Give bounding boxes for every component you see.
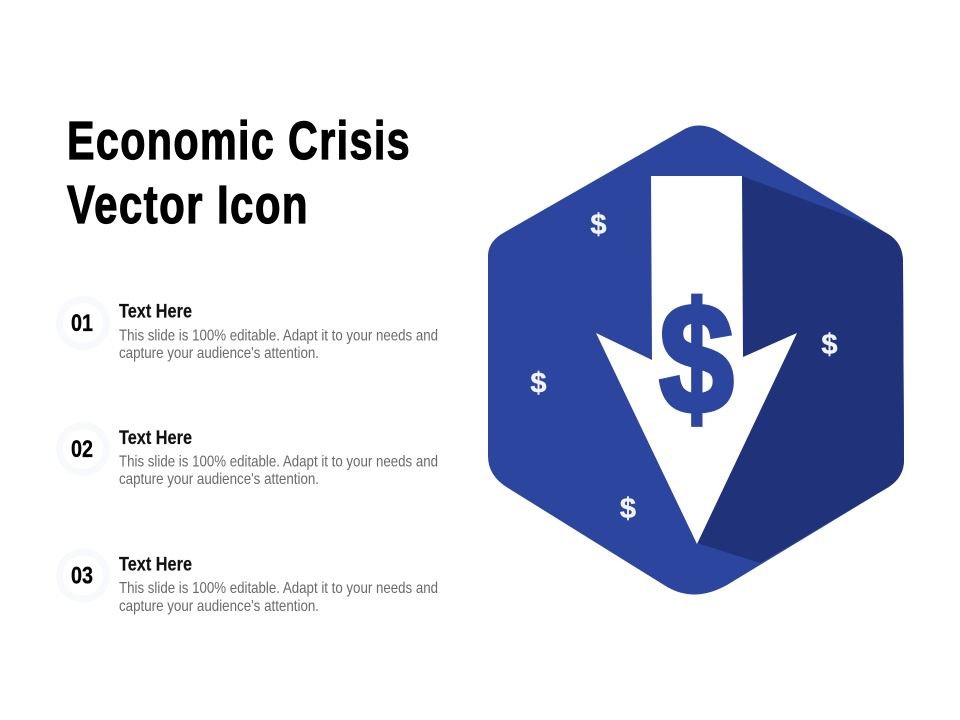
small dollar signs: $ bbox=[530, 368, 547, 400]
list item 02 bbox=[60, 426, 438, 488]
list item 03 bbox=[60, 552, 438, 615]
item heading 03: Text Here bbox=[119, 554, 192, 576]
large dollar sign: $ bbox=[659, 270, 734, 446]
item heading 01: Text Here bbox=[119, 302, 192, 322]
title bbox=[67, 111, 411, 235]
title: Vector Icon bbox=[67, 175, 309, 235]
small dollar signs: $ bbox=[590, 209, 607, 241]
item body 02: capture your audience's attention. bbox=[119, 471, 319, 488]
title: Economic Crisis bbox=[67, 111, 411, 171]
small dollar signs bbox=[530, 209, 838, 525]
item body 03: capture your audience's attention. bbox=[119, 598, 319, 615]
item body 01 bbox=[119, 328, 438, 362]
folded shadow bbox=[697, 176, 904, 563]
number badge 03 bbox=[60, 552, 106, 599]
hexagon icon bbox=[488, 126, 904, 594]
item body 01: capture your audience's attention. bbox=[119, 345, 319, 362]
item body 03 bbox=[119, 580, 438, 615]
number badge 02 bbox=[60, 426, 106, 472]
item body 02: This slide is 100% editable. Adapt it to your needs and bbox=[119, 454, 438, 470]
item heading 02: Text Here bbox=[119, 428, 192, 449]
number badge 01 bbox=[60, 300, 106, 346]
item body 02 bbox=[119, 454, 438, 488]
item body 03: This slide is 100% editable. Adapt it to your needs and bbox=[119, 580, 438, 597]
small dollar signs: $ bbox=[620, 493, 636, 525]
down arrow bbox=[596, 176, 797, 544]
number badge 03: 03 bbox=[71, 562, 93, 590]
item body 01: This slide is 100% editable. Adapt it to your needs and bbox=[119, 328, 438, 344]
number badge 02: 02 bbox=[71, 436, 93, 463]
hexagon background bbox=[488, 126, 904, 594]
small dollar signs: $ bbox=[821, 329, 838, 361]
number badge 01: 01 bbox=[71, 310, 93, 337]
list item 01 bbox=[60, 300, 438, 362]
